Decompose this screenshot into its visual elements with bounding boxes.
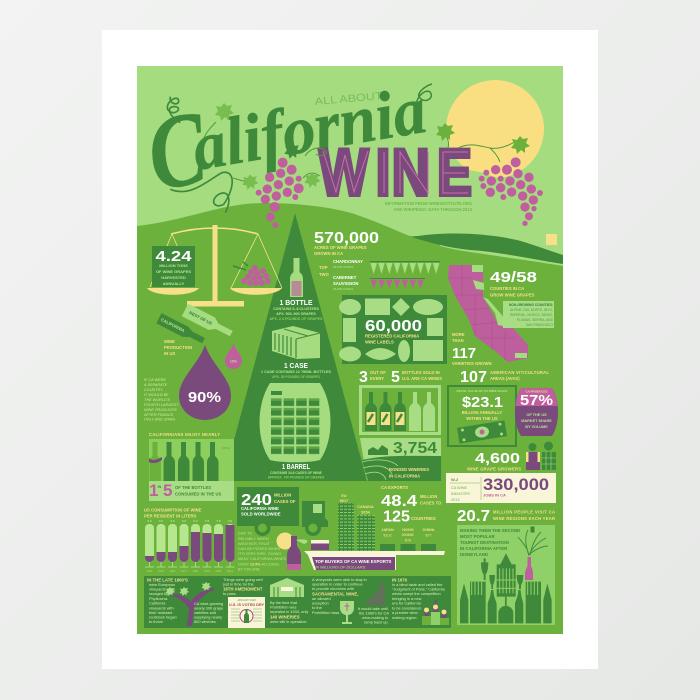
- history: 1976: a premier wine-: [392, 610, 420, 615]
- county lines: [449, 265, 515, 360]
- stat: 3 out of 5: [359, 369, 442, 386]
- logo mark: [546, 234, 557, 245]
- pink bottle: [525, 557, 533, 580]
- icon: farmers: [526, 442, 556, 470]
- stat: 117 varieties: VARIETIES GROWN: [452, 361, 491, 366]
- fact: separate country: A SEPARATE: [143, 383, 168, 387]
- label: wine production: WINE: [164, 339, 175, 344]
- sun: [446, 80, 544, 178]
- stat: 49/58 counties: COUNTIES IN CA: [490, 286, 524, 291]
- stat: 117 varieties: [452, 332, 491, 366]
- stat: 4.24 million tons: OF WINE GRAPES: [156, 269, 191, 274]
- history: 1976: "Judgment of Paris," California: [392, 586, 446, 592]
- fact: alcohol by volume: RELIABLY WARM: [238, 537, 269, 541]
- label: 1 case: [261, 363, 332, 379]
- stat: 57 percent barrel: BY VOLUME: [525, 425, 548, 429]
- Japan, Hong Kong, China: $78: [405, 538, 411, 542]
- truck: 240 million cases: CALIFORNIA WINE: [241, 506, 279, 511]
- truck: 240 million cases: 240: [241, 492, 272, 509]
- history: 1976: making region.: [392, 615, 418, 620]
- stat: 48.4 million exported: MILLION: [420, 494, 437, 499]
- stat: 48.4 million exported: [381, 485, 442, 526]
- splash: [149, 457, 162, 463]
- history: 1800s: ravaged by: [149, 591, 168, 596]
- chart: US consumption: 1961: [169, 569, 176, 573]
- icon: goblet: [340, 601, 354, 624]
- history: 1800s: Phylloxera.: [149, 596, 168, 601]
- scale icon: [147, 225, 282, 306]
- title: California: [139, 71, 431, 213]
- panel: bottles: [359, 385, 441, 435]
- stat: 20.7 million visitors: WINE REGIONS EACH YEAR: [493, 516, 555, 521]
- icon: dollar bill: [457, 420, 507, 444]
- grape cluster left: [256, 158, 304, 228]
- fact: alcohol by volume: [238, 532, 286, 572]
- chart: top buyers of CA wine: [304, 494, 445, 570]
- label: 1 bottle: 1 BOTTLE: [280, 300, 313, 307]
- history: 1800s: to thrive.: [149, 619, 164, 624]
- icon: sun and bottle: [276, 532, 308, 570]
- history: sacramental wine: Prohibition laws.: [312, 610, 340, 615]
- Japan, Hong Kong, China: KONG: [402, 533, 414, 537]
- stat: 4.24 million tons: MILLION TONS: [159, 263, 188, 268]
- label: 1 bottle: CONTAINS 6–8 CLUSTERS: [273, 307, 320, 311]
- panel: 1 in 5 bottles: CALIFORNIANS ENJOY NEARLY: [149, 432, 220, 437]
- label: 1 barrel: CONTAINS 24.6 CASES OF WINE: [270, 471, 323, 475]
- fact: separate country: [143, 378, 179, 422]
- truck: 240 million cases: MILLION: [274, 492, 291, 498]
- castle: [460, 553, 552, 623]
- fact: separate country: ITALY AND SPAIN: [144, 418, 175, 422]
- far hill overlapping sun: [440, 165, 563, 270]
- stat: 20.7 million visitors: MILLION PEOPLE VISIT CA: [493, 510, 555, 514]
- history: sacramental wine: to the: [312, 605, 322, 610]
- truck: 240 million cases: [237, 487, 328, 536]
- history: sacramental wine: an allowed: [312, 596, 331, 601]
- fact: alcohol by volume: OVER 13.5% ALCOHOL: [238, 562, 280, 566]
- history: 18th amendment: just in time for the: [222, 582, 254, 586]
- icon: bottle: [290, 258, 303, 297]
- vines and tendrils: [167, 84, 518, 213]
- icon: barrel: [260, 383, 330, 462]
- top two varietals: 78,900 ACRES: [333, 287, 353, 291]
- history: 1976: era for California: [392, 600, 422, 606]
- history: grape varieties: 800 wineries: [194, 619, 216, 624]
- history: 18th amendment: 18TH AMENDMENT: [223, 586, 263, 592]
- history: 1800s: IN THE LATE 1800'S: [147, 578, 188, 582]
- fact: separate country: THE WORLD'S: [144, 398, 171, 402]
- icon: box of wine: [311, 540, 329, 550]
- history: 1976: to be considered: [392, 606, 421, 610]
- history: sacramental wine: to provide churches with: [312, 586, 354, 591]
- stat: 3 out of 5: U.S. ARE CA WINES: [402, 376, 442, 381]
- panel: W-2 jobs: W-2: [451, 477, 459, 482]
- dark bottles: [365, 392, 406, 431]
- stat: 107 AVAs: AMERICAN VITICULTURAL: [490, 370, 549, 375]
- history: 1800s: their resistant: [149, 610, 173, 615]
- icon: purple vineyard: [364, 580, 385, 606]
- stat: 4.24 million tons: ANNUALLY: [163, 281, 185, 286]
- panel: retail value: $23.1: [462, 394, 503, 411]
- dark hill: [412, 234, 563, 264]
- panel: retail value: BILLION ANNUALLY: [462, 410, 502, 415]
- icon: winery: [368, 445, 388, 455]
- history: sacramental wine: exception: [312, 600, 329, 606]
- panel: 3,754 wineries: 3,754: [393, 440, 437, 457]
- panel: 1 in 5 bottles: (20%): [222, 446, 230, 450]
- label: 1 case: 1 CASE CONTAINS 12 750ML BOTTLES: [261, 370, 332, 374]
- chart: US consumption: 7.6: [216, 519, 221, 523]
- chart: US consumption: [144, 508, 234, 573]
- history: it would take until: the 1960's for CA: [359, 610, 389, 616]
- fact: alcohol by volume: BY VOLUME: [238, 568, 261, 572]
- Japan, Hong Kong, China: JAPAN: [381, 528, 394, 532]
- grape cluster right: [479, 157, 543, 226]
- stat: 49/58 counties: [490, 269, 537, 298]
- history: 18th amendment: Things were going well: [223, 577, 263, 582]
- history: 1976: IN 1976: [392, 578, 408, 582]
- history: grape varieties: [194, 601, 223, 624]
- truck: 240 million cases: SOLD WORLDWIDE: [241, 512, 281, 516]
- history: sacramental wine: SACRAMENTAL WINE,: [312, 592, 358, 596]
- banner: [304, 551, 445, 570]
- source note: INFORMATION FROM WINEINSTITUTE.ORG: [385, 201, 472, 206]
- chart: US consumption: 2.6: [147, 519, 152, 523]
- grape leaves: [215, 103, 530, 190]
- history: 18th amendment: to pass.: [223, 591, 237, 596]
- Japan, Hong Kong, China: [380, 528, 436, 551]
- history: 1800s: [147, 578, 188, 624]
- stat: 57 percent barrel: 57%: [520, 392, 553, 409]
- stat: 48.4 million exported: CA EXPORTS: [381, 485, 408, 490]
- chart: US consumption: 3.5: [159, 519, 163, 523]
- label: 1 case: 1 CASE: [284, 363, 308, 370]
- stat: 4,600 growers: 4,600: [475, 450, 520, 467]
- icon: grapes on scale: [233, 262, 271, 286]
- Canada bar: [357, 505, 375, 551]
- icon: newspaper: U.S. IS VOTED DRY: [229, 603, 265, 607]
- drop: 10 percent: 10%: [230, 360, 238, 364]
- first bottle with splash: [150, 442, 161, 481]
- panel: 3,754 wineries: IN CALIFORNIA: [389, 474, 420, 478]
- panel: 1 in 5 bottles: 5: [163, 481, 172, 500]
- panel: non-growing counties: PLUMAS, SIERRA, AND: [517, 318, 554, 322]
- chart: US consumption: 1981: [192, 569, 199, 573]
- history: sacramental wine: [312, 577, 367, 615]
- print mat: [102, 30, 598, 669]
- panel: non-growing counties: ALPINE, DEL NORTE, INYO,: [510, 308, 553, 312]
- icon: newspaper: [228, 597, 265, 628]
- text: tourist destination: MAKING THEM THE SECOND: [460, 528, 520, 533]
- panel: Disneyland castle: [457, 525, 555, 625]
- icon: case: [272, 326, 320, 359]
- title: California: alifornia: [187, 71, 431, 185]
- panel: 1 in 5 bottles: [149, 432, 234, 501]
- stat: 49/58 counties: 49/58: [490, 269, 537, 286]
- Japan, Hong Kong, China: $77: [425, 534, 432, 538]
- fact: separate country: IT WOULD BE: [144, 393, 169, 397]
- stat: 3 out of 5: 3: [359, 369, 368, 386]
- chart: US consumption: 1941: [146, 569, 153, 573]
- icon: newspaper: JANUARY 1920: [237, 598, 256, 602]
- stat: 3 out of 5: OUT OF: [370, 370, 386, 375]
- EU bar: $617: [340, 499, 348, 503]
- stat: 107 AVAs: AREAS (AVAS): [490, 376, 520, 381]
- Japan, Hong Kong, China: HONG: [402, 528, 414, 532]
- fact: alcohol by volume: IT'S VERY RIPE, GIVING: [238, 552, 281, 556]
- text: tourist destination: [460, 528, 520, 557]
- stat: 57 percent barrel: CA PRODUCES: [525, 390, 548, 394]
- chart: US consumption: 7.8: [205, 519, 209, 523]
- source note: AND WIKIPEDIA: DATA THROUGH 2013: [393, 207, 473, 212]
- history: 1976: [392, 578, 446, 620]
- panel: W-2 jobs: CA WINE: [451, 486, 468, 490]
- cabernet bunches: [370, 278, 425, 289]
- panel: retail value: [448, 386, 516, 446]
- poster background: [137, 66, 563, 634]
- fact: alcohol by volume: MANY CALIFORNIA WINES: [238, 557, 286, 561]
- label: 1 case: APX. 30 POUNDS OF GRAPES: [272, 375, 321, 379]
- wine production bottles: [156, 304, 242, 420]
- text: tourist destination: IN CALIFORNIA AFTER: [460, 546, 508, 551]
- panel: W-2 jobs: 2013: [451, 498, 459, 502]
- panel: history timeline: [144, 576, 451, 628]
- chart: US consumption: PER RESIDENT IN LITERS: [144, 514, 197, 518]
- history: 140 wineries: repealed in 1933, only: [270, 609, 308, 614]
- history: 18th amendment: [222, 577, 263, 596]
- stat: 57 percent barrel: OF THE US: [526, 413, 547, 417]
- top two varietals: TWO: [319, 272, 330, 277]
- stat: 4.24 million tons: [152, 246, 195, 287]
- icon: podium: [422, 600, 449, 625]
- title: All About: ALL ABOUT: [314, 90, 384, 108]
- stat: 3 out of 5: 5: [391, 369, 400, 386]
- history: it would take until: It would take until: [358, 606, 388, 611]
- stat: 117 varieties: 117: [452, 345, 476, 362]
- label: 1 bottle: [270, 300, 323, 321]
- history: 140 wineries: Prohibition was: [270, 604, 296, 610]
- stat: 48.4 million exported: 48.4: [381, 493, 417, 510]
- text: tourist destination: MOST POPULAR: [460, 534, 496, 539]
- panel: non-growing counties: SAN FRANCISCO: [526, 323, 553, 327]
- source note: [385, 201, 473, 212]
- chart: US consumption: 1991: [204, 569, 211, 573]
- panel: non-growing counties: IMPERIAL, MODOC, MONO,: [510, 313, 553, 317]
- history: 1976: wines swept the competition: [392, 591, 441, 596]
- stat: 4.24 million tons: 4.24: [156, 248, 192, 265]
- chart: US consumption: 2011: [227, 569, 233, 573]
- sky: [137, 66, 563, 236]
- panel: 60,000 labels: REGISTERED CALIFORNIA: [365, 334, 419, 338]
- top two varietals: CHARDONNAY: [333, 259, 363, 264]
- EU bar: [338, 494, 354, 551]
- stat: 48.4 million exported: CASES TO: [420, 500, 442, 506]
- history: grape varieties: varieties and: [194, 610, 216, 615]
- chart: US consumption: 1951: [158, 569, 165, 573]
- history: 1976: bringing in a new: [392, 596, 422, 601]
- fact: alcohol by volume: DUE TO: [238, 532, 252, 536]
- fact: alcohol by volume: CAN BE PICKED WHEN: [238, 547, 280, 551]
- stat: 48.4 million exported: COUNTRIES: [411, 516, 436, 521]
- label: wine production: PRODUCTION: [164, 345, 192, 350]
- top two varietals: TOP: [319, 265, 328, 270]
- stat: 570,000 acres: [314, 230, 379, 256]
- top two varietals: CABERNET: [333, 275, 357, 280]
- chart: US consumption: US CONSUMPTION OF WINE: [144, 508, 202, 512]
- panel: W-2 jobs: [446, 473, 556, 503]
- top two varietals: [319, 259, 440, 291]
- panel: non-growing counties: NON-GROWING COUNTIES:: [509, 303, 553, 307]
- text: tourist destination: DISNEYLAND: [460, 552, 488, 557]
- non-growing counties: [472, 265, 527, 358]
- panel: non-growing counties: [503, 301, 554, 328]
- stat: 57 percent barrel: [515, 388, 558, 436]
- panel: retail value: RETAIL VALUE OF CA WINE SALES: [457, 389, 507, 393]
- bottle: california: CALIFORNIA: [160, 317, 185, 333]
- bottle: rest of us: REST OF US: [188, 310, 213, 326]
- history: grape varieties: supplying nearly: [194, 614, 222, 620]
- fireworks: [518, 527, 548, 556]
- top two varietals: SAUVIGNON: [333, 281, 358, 286]
- chart: US consumption: 8.0: [193, 519, 198, 523]
- label: 1 bottle: APX. 2.4 POUNDS OF GRAPES: [270, 317, 323, 321]
- stat: 570,000 acres: ACRES OF WINE GRAPES: [314, 245, 367, 250]
- chart: top buyers of CA wine: TOP BUYERS OF CA WINE EXPORTS: [315, 559, 391, 564]
- map of California: [448, 265, 528, 362]
- panel: W-2 jobs: 330,000: [483, 475, 549, 494]
- text: tourist destination: TOURIST DESTINATION: [460, 540, 509, 545]
- panel: W-2 jobs: JOBS IN CA: [483, 492, 506, 498]
- chart: US consumption: 9.6: [228, 519, 232, 523]
- history: 140 wineries: were still in operation: [270, 619, 307, 624]
- label: wine production: IN US: [164, 351, 175, 356]
- wine inline strokes: [323, 151, 468, 193]
- fact: separate country: COUNTRY,: [144, 388, 163, 392]
- panel: 60,000 labels: WINE LABELS: [365, 340, 394, 344]
- label: wine production: [164, 339, 192, 356]
- history: 1800s: vineyards with: [149, 606, 174, 610]
- stat: 107 AVAs: [460, 369, 549, 386]
- panel: 60,000 labels: 60,000: [365, 318, 422, 335]
- panel: 3,754 wineries: [360, 438, 441, 481]
- stat: 20.7 million visitors: 20.7: [457, 508, 490, 525]
- icon: winery building: [270, 578, 304, 597]
- pyramid: bottle, case, barrel: [223, 213, 367, 481]
- chardonnay bunches: [370, 261, 440, 275]
- stat: 3 out of 5: BOTTLES SOLD IN: [402, 370, 440, 375]
- Canada bar: CANADA: [357, 505, 374, 509]
- wine levels: [145, 525, 234, 562]
- panel: 1 in 5 bottles: CONSUMED IN THE US: [175, 492, 222, 496]
- bottle labels: [366, 412, 404, 425]
- history: sacramental wine: operation in order to continue: [312, 582, 363, 586]
- chart: US consumption: 5.0: [182, 519, 186, 523]
- history: 1800s: vineyards were: [149, 586, 175, 592]
- fact: alcohol by volume: WEATHER, FRUIT: [238, 542, 271, 546]
- truck: 240 million cases: CASES OF: [274, 499, 296, 504]
- stat: 49/58 counties: GROW WINE GRAPES: [490, 292, 535, 298]
- Japan, Hong Kong, China: CHINA: [422, 528, 435, 532]
- panel: 3,754 wineries: BONDED WINERIES: [389, 467, 429, 472]
- tubes: [145, 524, 234, 562]
- top two varietals: 95,000 ACRES: [333, 265, 353, 269]
- fact: separate country: FOURTH LARGEST: [144, 403, 179, 407]
- panel: 60,000 labels: [339, 295, 447, 364]
- chart: US consumption: 2001: [215, 569, 222, 573]
- fact: separate country: AFTER FRANCE,: [143, 413, 174, 417]
- stat: 3 out of 5: EVERY: [370, 376, 384, 381]
- stat: 117 varieties: THAN: [452, 338, 464, 343]
- panel: 1 in 5 bottles: 1: [149, 481, 158, 500]
- history: grape varieties: CA wine-growing: [194, 601, 223, 606]
- drop: 90 percent: 90%: [188, 390, 221, 406]
- title: California: C: [139, 88, 216, 213]
- history: 140 wineries: By the time that: [270, 600, 298, 605]
- panel: 1 in 5 bottles: IN: [158, 485, 162, 489]
- light bottles: [409, 392, 435, 431]
- stat: 117 varieties: MORE: [452, 332, 465, 337]
- stat: 48.4 million exported: 125: [383, 508, 410, 526]
- hills: [137, 203, 563, 300]
- history: 1800s: California: [149, 600, 166, 606]
- history: grape varieties: nearly 300 grape: [194, 606, 223, 610]
- history: sacramental wine: A vineyards were able to stay in: [312, 577, 367, 582]
- stat: 107 AVAs: 107: [460, 369, 487, 386]
- fact: separate country: WINE PRODUCER: [144, 408, 177, 412]
- history: 140 wineries: [270, 600, 308, 624]
- history: 1976: in a blind taste and called the: [392, 582, 442, 587]
- label: 1 bottle: APX. 500–900 GRAPES: [276, 312, 316, 316]
- stat: 20.7 million visitors: [457, 508, 555, 525]
- label: 1 barrel: APPROX. 740 POUNDS OF GRAPES: [268, 476, 325, 480]
- title: Wine: WINE: [319, 135, 472, 209]
- C swash top: [167, 97, 180, 123]
- stat: 4,600 growers: WINE GRAPE GROWERS: [467, 466, 521, 472]
- stat: 570,000 acres: GROWN IN CA: [314, 251, 343, 256]
- label: 1 barrel: 1 BARREL: [282, 464, 311, 471]
- history: it would take until: ramp back up.: [364, 620, 389, 624]
- chart: US consumption: 1971: [181, 569, 188, 573]
- stat: 4,600 growers: [467, 450, 521, 472]
- stat: 4.24 million tons: HARVESTED: [161, 275, 186, 280]
- Canada bar: $154: [361, 510, 371, 514]
- chart: US consumption: 3.6: [170, 519, 175, 523]
- panel: 1 in 5 bottles: OF THE BOTTLES: [175, 485, 211, 490]
- stat: 570,000 acres: 570,000: [314, 230, 379, 247]
- EU bar: EU: [341, 494, 347, 498]
- history: it would take until: wine-making to: [362, 615, 388, 620]
- stat: 57 percent barrel: MARKET SHARE: [521, 419, 552, 423]
- panel: W-2 jobs: INDUSTRY: [451, 492, 471, 496]
- fact: separate country: IF CA WERE: [144, 378, 166, 382]
- label: 1 barrel: [268, 464, 325, 480]
- chart: top buyers of CA wine: IN MILLIONS OF DOLLARS: [315, 564, 365, 570]
- history: 1800s: wine European: [149, 582, 175, 587]
- Japan, Hong Kong, China: $102: [383, 534, 392, 538]
- panel: retail value: WITHIN THE US: [466, 416, 498, 421]
- history: 140 wineries: 140 WINERIES: [270, 614, 300, 620]
- history: 1800s: rootstock began: [149, 614, 177, 620]
- dark bottles: [164, 442, 218, 481]
- icon: vine tree: [166, 582, 214, 626]
- history: it would take until: [358, 606, 389, 624]
- stems: [145, 562, 234, 567]
- C swash bottom: [170, 172, 232, 213]
